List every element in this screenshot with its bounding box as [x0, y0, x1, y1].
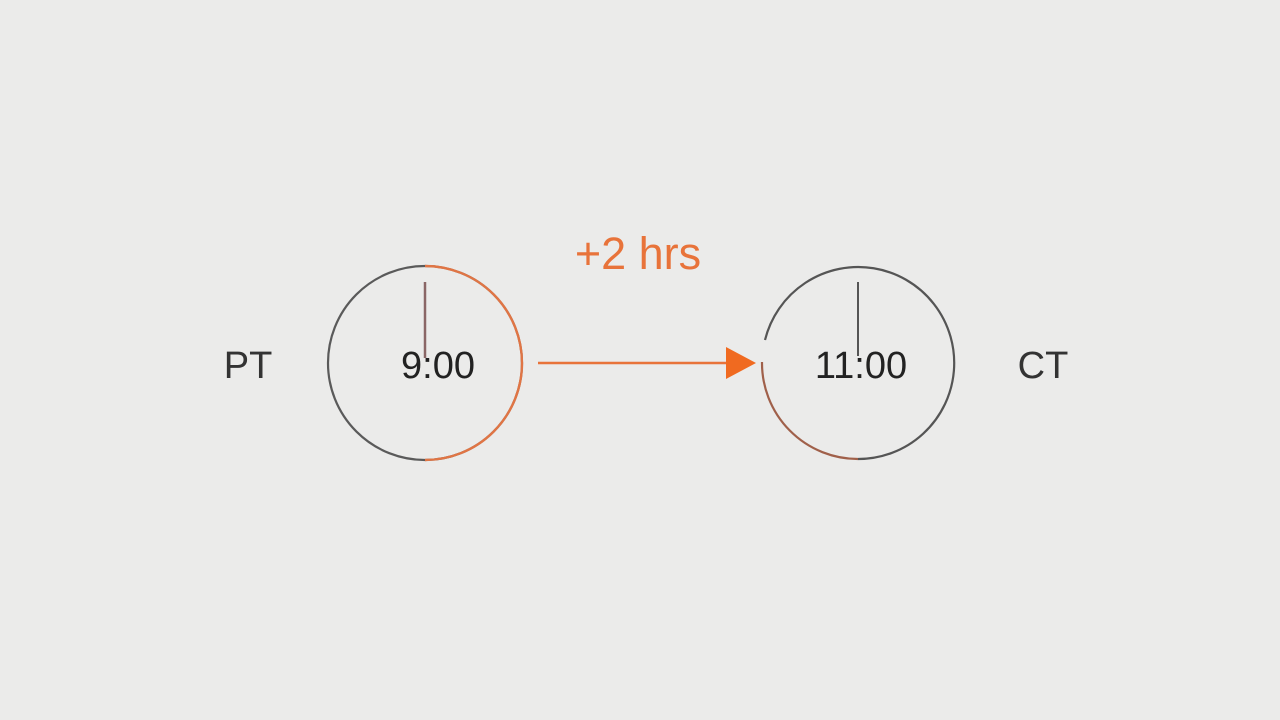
label: +2 hrs: +2 hrs	[575, 228, 701, 279]
label: PT: PT	[224, 345, 272, 387]
clock: PT 9:00: 9:00	[401, 345, 475, 387]
clock: CT 11:00: 11:00	[815, 345, 907, 387]
clock: PT 9:00	[328, 266, 522, 460]
label: CT: CT	[1018, 345, 1068, 387]
clock: CT 11:00	[762, 267, 954, 459]
arrow	[538, 347, 756, 379]
